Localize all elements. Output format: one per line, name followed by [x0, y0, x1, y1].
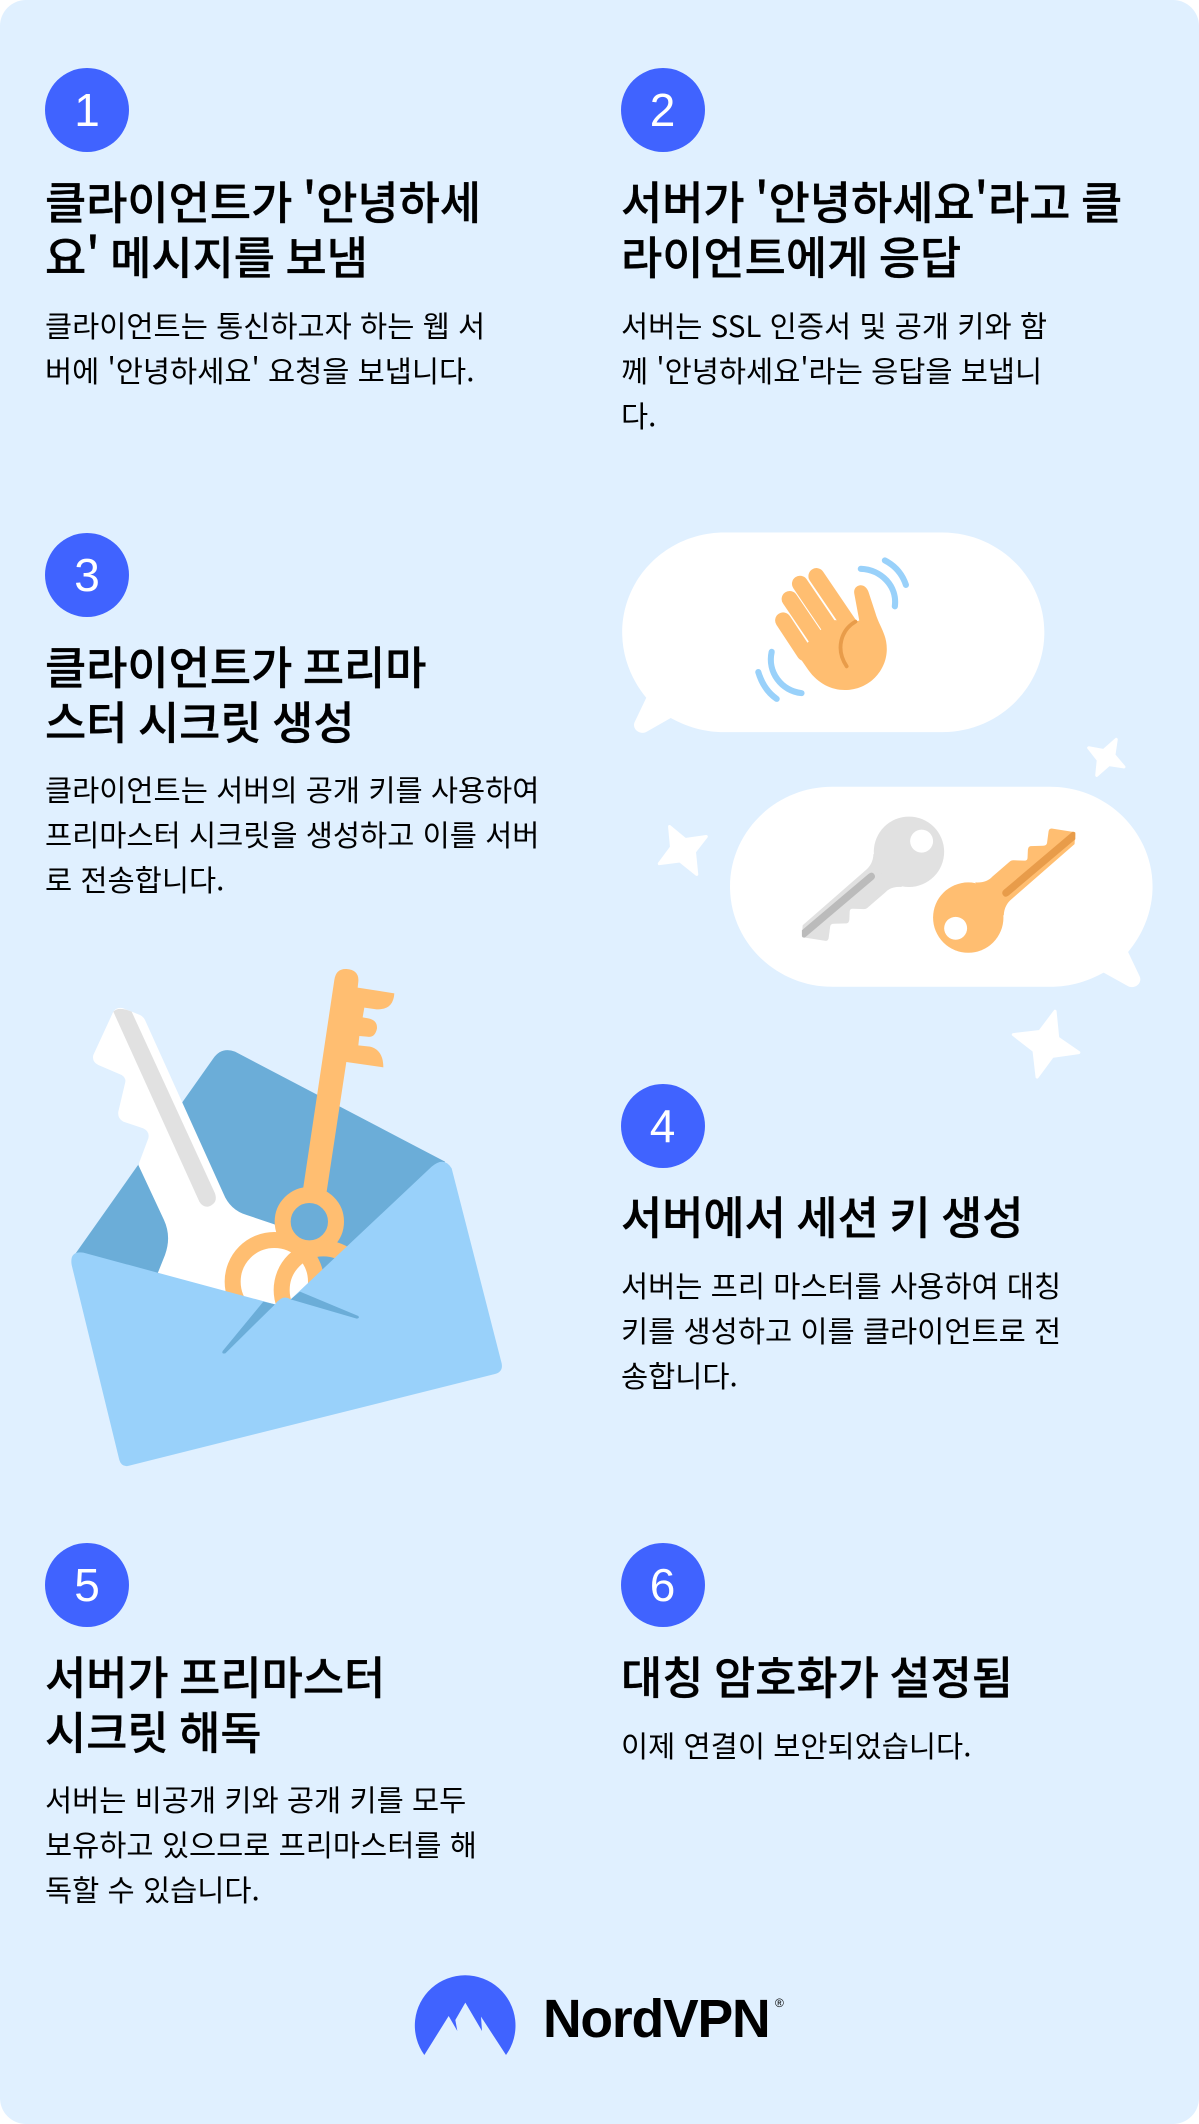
- body step 3: 프리마스터 시크릿을 생성하고 이를 서버: [45, 813, 539, 855]
- body step 4: 키를 생성하고 이를 클라이언트로 전: [621, 1309, 1061, 1351]
- step 5: [45, 1543, 477, 1910]
- body step 6: 이제 연결이 보안되었습니다.: [621, 1724, 971, 1766]
- speech bubble with keys: [730, 787, 1153, 987]
- body step 4: 송합니다.: [621, 1354, 738, 1396]
- number badge 2: 2: [650, 84, 675, 136]
- heading step 1: 클라이언트가 '안녕하세: [45, 167, 481, 232]
- heading step 2: 서버가 '안녕하세요'라고 클: [621, 167, 1122, 232]
- speech bubble with waving hand: [622, 533, 1044, 733]
- number badge 1: 1: [74, 84, 100, 136]
- white key: [93, 1008, 316, 1323]
- body step 1: [45, 304, 485, 391]
- body step 2: 다.: [621, 394, 656, 436]
- heading step 5: 시크릿 해독: [45, 1697, 262, 1762]
- number badge 3: 3: [74, 549, 100, 601]
- step 1: [45, 68, 485, 391]
- number badge 6: 6: [650, 1558, 675, 1610]
- body step 2: [621, 304, 1047, 436]
- orange key with rings: [233, 969, 394, 1332]
- body step 2: 서버는 SSL 인증서 및 공개 키와 함: [621, 304, 1047, 346]
- number badge 3: [45, 533, 129, 617]
- heading step 2: 라이언트에게 응답: [621, 222, 961, 287]
- envelope fold shadows: [222, 1292, 359, 1354]
- body step 4: [621, 1264, 1061, 1396]
- number badge 6: [620, 1542, 704, 1626]
- heading step 2: [621, 167, 1122, 287]
- body step 5: 보유하고 있으므로 프리마스터를 해: [45, 1823, 477, 1865]
- heading step 3: 스터 시크릿 생성: [45, 687, 355, 752]
- heading step 1: [45, 167, 481, 287]
- body step 1: 버에 '안녕하세요' 요청을 보냅니다.: [45, 349, 474, 391]
- envelope front: [71, 1162, 502, 1466]
- body step 5: 서버는 비공개 키와 공개 키를 모두: [45, 1778, 466, 1820]
- logo: NordVPN: [415, 1975, 784, 2055]
- icon: orange key: [933, 828, 1075, 953]
- heading step 5: 서버가 프리마스터: [45, 1642, 385, 1707]
- body step 4: 서버는 프리 마스터를 사용하여 대칭: [621, 1264, 1061, 1306]
- number badge 1: [45, 68, 129, 152]
- icon: waving hand: [758, 560, 906, 699]
- heading step 4: 서버에서 세션 키 생성: [621, 1182, 1024, 1247]
- step 2: [621, 68, 1122, 436]
- registered mark: ®: [775, 1996, 784, 2010]
- heading step 1: 요' 메시지를 보냄: [45, 222, 368, 287]
- logo wordmark: NordVPN: [543, 1990, 769, 2049]
- heading step 3: 클라이언트가 프리마: [45, 632, 426, 697]
- body step 1: 클라이언트는 통신하고자 하는 웹 서: [45, 304, 485, 346]
- logo mark: [415, 1975, 515, 2055]
- number badge 4: [620, 1084, 704, 1168]
- body step 2: 께 '안녕하세요'라는 응답을 보냅니: [621, 349, 1042, 391]
- body step 3: [45, 768, 539, 900]
- step 4: [621, 1084, 1061, 1396]
- heading step 6: 대칭 암호화가 설정됨: [621, 1642, 1013, 1707]
- number badge 4: 4: [650, 1100, 675, 1152]
- step 3: [45, 533, 539, 900]
- number badge 2: [620, 68, 704, 152]
- body step 5: 독할 수 있습니다.: [45, 1868, 260, 1910]
- heading step 5: [45, 1642, 385, 1762]
- decorative stars: [659, 739, 1124, 1077]
- number badge 5: 5: [74, 1558, 100, 1610]
- illustration: speech bubbles, hand and keys: [622, 533, 1153, 1077]
- body step 3: 로 전송합니다.: [45, 858, 224, 900]
- number badge 5: [45, 1542, 129, 1626]
- body step 3: 클라이언트는 서버의 공개 키를 사용하여: [45, 768, 539, 810]
- illustration: envelope with keys: [71, 969, 502, 1466]
- icon: gray key: [802, 817, 944, 941]
- envelope back flap: [73, 1050, 445, 1307]
- body step 5: [45, 1778, 477, 1910]
- heading step 3: [45, 632, 426, 752]
